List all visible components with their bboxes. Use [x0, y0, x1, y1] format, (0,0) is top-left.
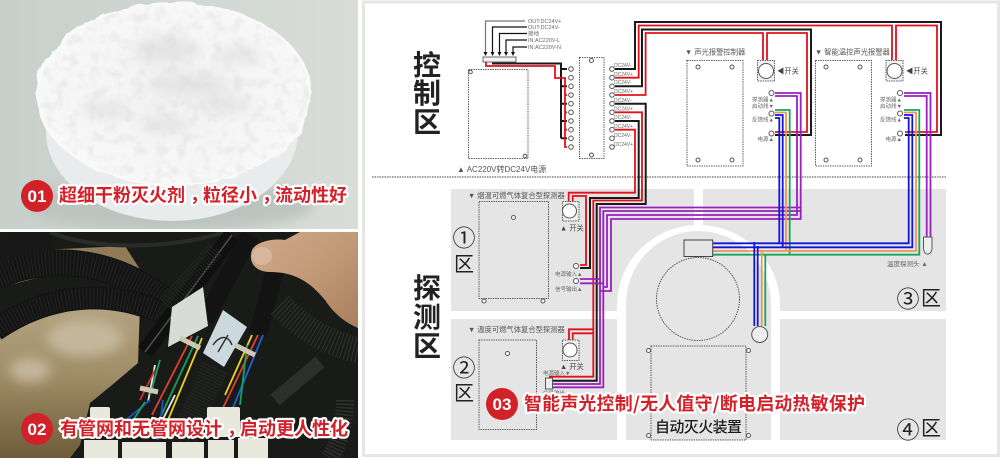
zone 4 label — [896, 411, 941, 445]
heading: detection zone: 区 — [413, 325, 441, 365]
intelligent temperature sound-light alarm: 反馈线▲ — [880, 116, 902, 124]
smoke and gas detector, zone 1: 电源输入▲ — [555, 270, 582, 278]
sound-light alarm controller: ▼ 声光报警控制器 — [685, 48, 746, 56]
zone 2 label: ② — [452, 349, 476, 383]
extinguisher device — [646, 240, 768, 440]
power input connector and labels: IN:AC220V-N — [528, 45, 561, 51]
caption 01: 01 — [28, 187, 46, 206]
output terminals DC24V: DC24V- — [614, 133, 632, 139]
sound-light alarm controller: 启动线▼ — [752, 102, 774, 110]
sound-light alarm controller: 反馈线▲ — [752, 116, 774, 124]
output terminals DC24V: DC24V- — [614, 98, 632, 104]
power input connector and labels — [483, 19, 561, 62]
zone 3 label: 区 — [921, 282, 941, 311]
output terminals DC24V: DC24V+ — [614, 72, 633, 78]
output terminals DC24V — [610, 63, 633, 149]
output terminals DC24V: DC24V- — [614, 115, 632, 121]
temperature and gas detector, zone 2: ▲ 开关 — [560, 362, 584, 371]
output terminals DC24V: DC24V+ — [614, 124, 633, 130]
power input connector and labels: OUT:DC24V+ — [528, 19, 561, 25]
output terminals DC24V: DC24V+ — [614, 106, 633, 112]
intelligent temperature sound-light alarm: ▼ 智能温控声光报警器 — [815, 48, 891, 56]
zone 4 label: ④ — [896, 411, 920, 445]
zone 2 label — [452, 349, 476, 406]
output terminals DC24V: DC24V- — [614, 63, 632, 69]
smoke and gas detector, zone 1: ▲ 开关 — [560, 224, 584, 232]
heading: detection zone — [413, 267, 441, 365]
intelligent temperature sound-light alarm: 电源▲ — [886, 135, 902, 143]
signal wires — [549, 93, 930, 387]
zone 1 label — [452, 219, 476, 277]
temperature and gas detector, zone 2: 信号输出▲ — [543, 389, 570, 397]
smoke and gas detector, zone 1: 信号输出▲ — [555, 285, 582, 293]
sound-light alarm controller: ◀开关 — [777, 66, 799, 76]
panel: wiring diagram frame — [364, 2, 998, 456]
terminal strip wiring — [486, 58, 604, 158]
sound-light alarm controller — [685, 48, 799, 166]
photo: wiring harness held by hand — [0, 232, 358, 458]
heading: control zone: 区 — [413, 101, 441, 141]
output terminals DC24V: DC24V+ — [614, 142, 633, 148]
sound-light alarm controller: 电源▲ — [758, 135, 774, 143]
caption 02: 02 — [28, 420, 46, 439]
power input connector and labels: OUT:DC24V- — [528, 25, 560, 31]
smoke and gas detector, zone 1: ▼ 烟温可燃气体复合型探测器 — [468, 191, 566, 200]
intelligent temperature sound-light alarm: 启动线▼ — [880, 102, 902, 110]
caption 01: 超细干粉灭火剂 ，粒径小 ，流动性好 — [59, 182, 347, 208]
temperature and gas detector, zone 2: 电源输入▼ — [543, 369, 570, 377]
heading: detection zone: 测 — [413, 296, 441, 336]
AC220V to DC24V power supply — [457, 70, 546, 174]
zone 2 label: 区 — [454, 377, 474, 406]
heading: detection zone: 探 — [413, 267, 441, 307]
zone 3 label: ③ — [896, 280, 920, 314]
zone 3 label — [896, 280, 941, 314]
caption 03: 智能声光控制/无人值守/断电启动热敏保护 — [524, 390, 865, 416]
intelligent temperature sound-light alarm — [815, 48, 928, 166]
photo: white dry powder in a dish — [0, 0, 358, 231]
temperature probe: 温度探测头 ▲ — [887, 259, 928, 268]
heading: control zone: 控 — [413, 44, 441, 84]
power input connector and labels: IN:AC220V-L — [528, 38, 560, 44]
AC220V to DC24V power supply: ▲ AC220V转DC24V电源 — [457, 164, 546, 174]
intelligent temperature sound-light alarm: ◀开关 — [906, 66, 928, 76]
output terminals DC24V: DC24V+ — [614, 89, 633, 95]
temperature and gas detector, zone 2 — [468, 325, 584, 430]
zone 1 label: ① — [452, 219, 476, 253]
heading: control zone — [413, 44, 441, 141]
caption 02: 有管网和无管网设计 ，启动更人性化 — [60, 415, 348, 441]
sound-light alarm controller: 探测器▲ — [752, 96, 774, 104]
extinguisher device: 自动灭火装置 — [655, 416, 742, 437]
caption 03: 03 — [493, 395, 511, 414]
zone divider line — [372, 176, 946, 178]
temperature probe — [887, 237, 932, 268]
zone 1 label: 区 — [454, 248, 474, 277]
zone 4 label: 区 — [921, 412, 941, 441]
temperature and gas detector, zone 2: ▼ 温度可燃气体复合型探测器 — [468, 325, 566, 334]
heading: control zone: 制 — [413, 72, 441, 112]
smoke and gas detector, zone 1 — [468, 191, 584, 303]
intelligent temperature sound-light alarm: 探测器▲ — [880, 96, 902, 104]
output terminals DC24V: DC24V- — [614, 80, 632, 86]
main power wires — [549, 22, 941, 381]
power input connector and labels: 接地 — [528, 30, 540, 38]
panel: detection zones background — [451, 189, 946, 445]
